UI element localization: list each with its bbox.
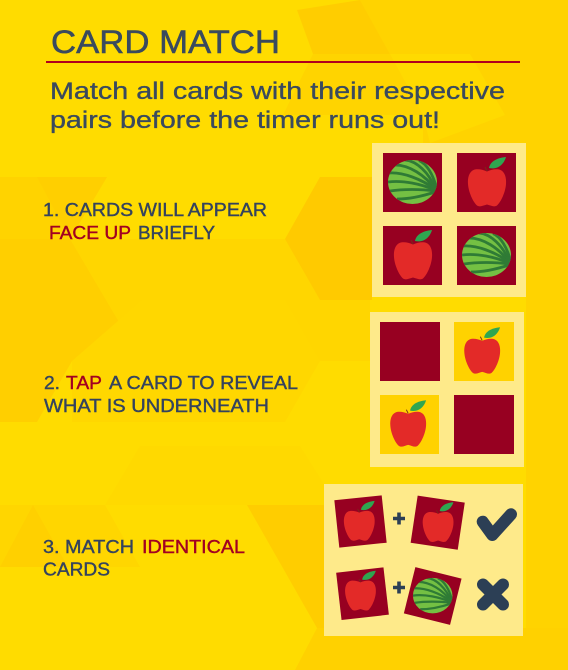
icon: plus: [393, 512, 405, 524]
panel 2: tap to reveal: [370, 312, 524, 467]
card: revealed apple: [380, 395, 439, 454]
step 1 text: FACE UP: [49, 222, 131, 243]
card: tilted apple: [336, 566, 389, 620]
step 1 text: 1. CARDS WILL APPEAR: [43, 199, 267, 220]
step 2 text: 2.: [44, 372, 60, 393]
step 2 text: [44, 372, 298, 416]
card: face down: [454, 395, 514, 454]
step 2 text: TAP: [66, 372, 102, 393]
card: watermelon: [383, 153, 442, 212]
step 3 text: [43, 536, 245, 580]
subtitle: Match all cards with their respective: [50, 78, 505, 105]
card: watermelon: [457, 226, 516, 285]
card: tilted apple: [411, 496, 465, 550]
step 3 text: IDENTICAL: [142, 536, 245, 557]
title underline: [46, 61, 520, 63]
card: tilted apple: [334, 495, 387, 548]
step 2 text: WHAT IS UNDERNEATH: [44, 395, 269, 416]
panel 3: matching examples: [324, 484, 523, 636]
card: apple: [383, 226, 442, 285]
step 3 text: 3. MATCH: [43, 536, 134, 557]
step 1 text: [43, 199, 267, 243]
card: apple: [457, 153, 516, 212]
subtitle: [50, 78, 505, 134]
step 1 text: BRIEFLY: [138, 222, 215, 243]
card: face down: [380, 322, 440, 381]
icon: check mark: [483, 514, 511, 535]
step 3 text: CARDS: [43, 558, 110, 580]
step 2 text: A CARD TO REVEAL: [109, 372, 298, 393]
icon: cross: [483, 584, 503, 604]
card: tilted watermelon: [404, 567, 462, 625]
icon: plus: [393, 582, 405, 594]
subtitle: pairs before the timer runs out!: [50, 107, 440, 134]
title: CARD MATCH: [51, 24, 280, 60]
card: revealed apple: [454, 322, 514, 381]
panel 1: cards face up: [372, 143, 526, 297]
